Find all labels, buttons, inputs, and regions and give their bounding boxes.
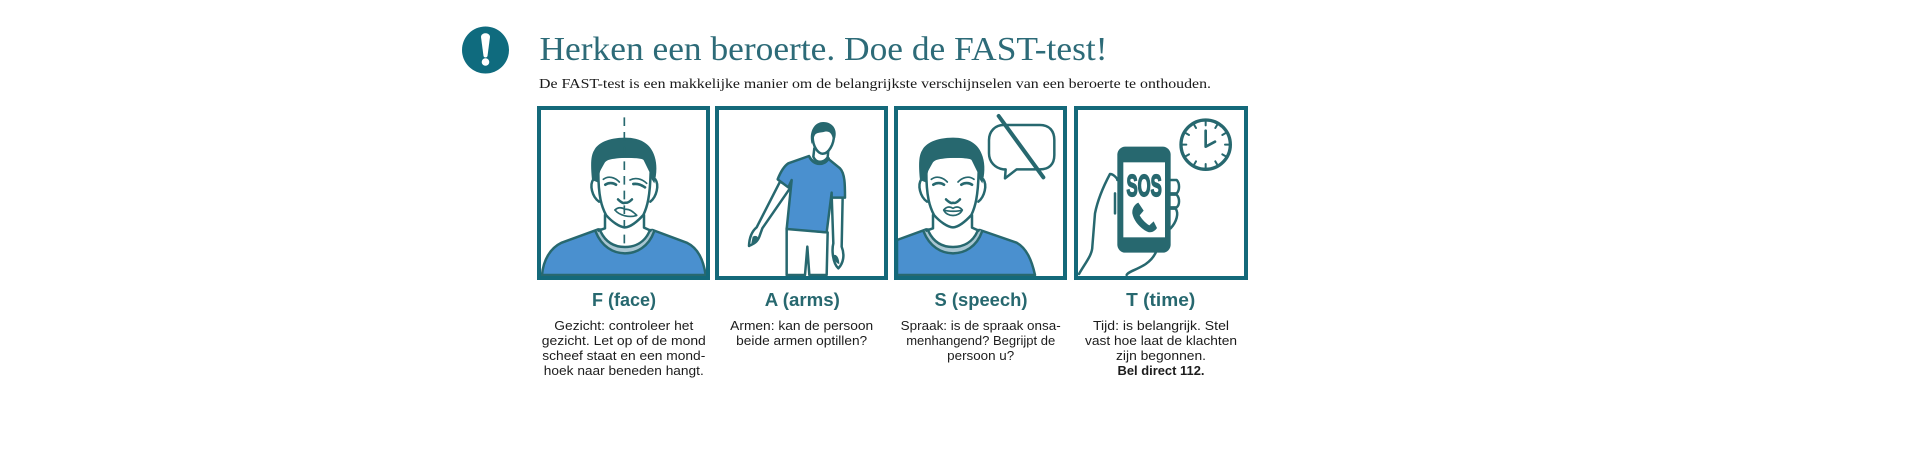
illustration: person who cannot speak: [897, 138, 1035, 275]
description: persoon u?: [947, 348, 1014, 363]
icon: clock: [1181, 120, 1230, 169]
description: beide armen optillen?: [736, 333, 867, 348]
description: gezicht. Let op of de mond: [542, 333, 706, 348]
description: hoek naar beneden hangt.: [544, 363, 704, 378]
frame: [539, 108, 708, 278]
description: scheef staat en een mond-: [542, 348, 705, 363]
panel: speech: [896, 108, 1065, 363]
description: [542, 318, 706, 378]
heading: T (time): [1126, 290, 1195, 310]
description: Bel direct 112.: [1118, 363, 1204, 378]
illustration: hand holding phone with SOS: SOS: [1126, 169, 1162, 203]
title: Herken een beroerte. Doe de FAST-test!: [540, 31, 1108, 68]
description: [1085, 318, 1237, 378]
panel: face: [539, 108, 708, 378]
description: Tijd: is belangrijk. Stel: [1093, 318, 1229, 333]
icon: exclamation mark: [462, 26, 509, 74]
heading: A (arms): [765, 290, 840, 310]
description: [901, 318, 1061, 363]
icon: crossed-out speech bubble: [989, 116, 1054, 178]
description: [730, 318, 873, 348]
panel: time: [1076, 108, 1246, 378]
panel: arms: [717, 108, 886, 348]
description: menhangend? Begrijpt de: [906, 333, 1055, 348]
frame: [1076, 108, 1246, 278]
subtitle: De FAST-test is een makkelijke manier om de belangrijkste verschijnselen van een beroerte te onthouden.: [539, 77, 1211, 92]
illustration: face with drooping mouth: [542, 117, 706, 275]
illustration: hand holding phone with SOS: [1079, 147, 1179, 275]
heading: S (speech): [934, 290, 1028, 310]
description: Gezicht: controleer het: [554, 318, 694, 333]
description: zijn begonnen.: [1116, 348, 1206, 363]
frame: [896, 108, 1065, 278]
description: vast hoe laat de klachten: [1085, 333, 1237, 348]
illustration: person with sinking arm: [749, 122, 845, 275]
description: Armen: kan de persoon: [730, 318, 873, 333]
heading: F (face): [592, 290, 656, 310]
frame: [717, 108, 886, 278]
description: Spraak: is de spraak onsa-: [901, 318, 1061, 333]
